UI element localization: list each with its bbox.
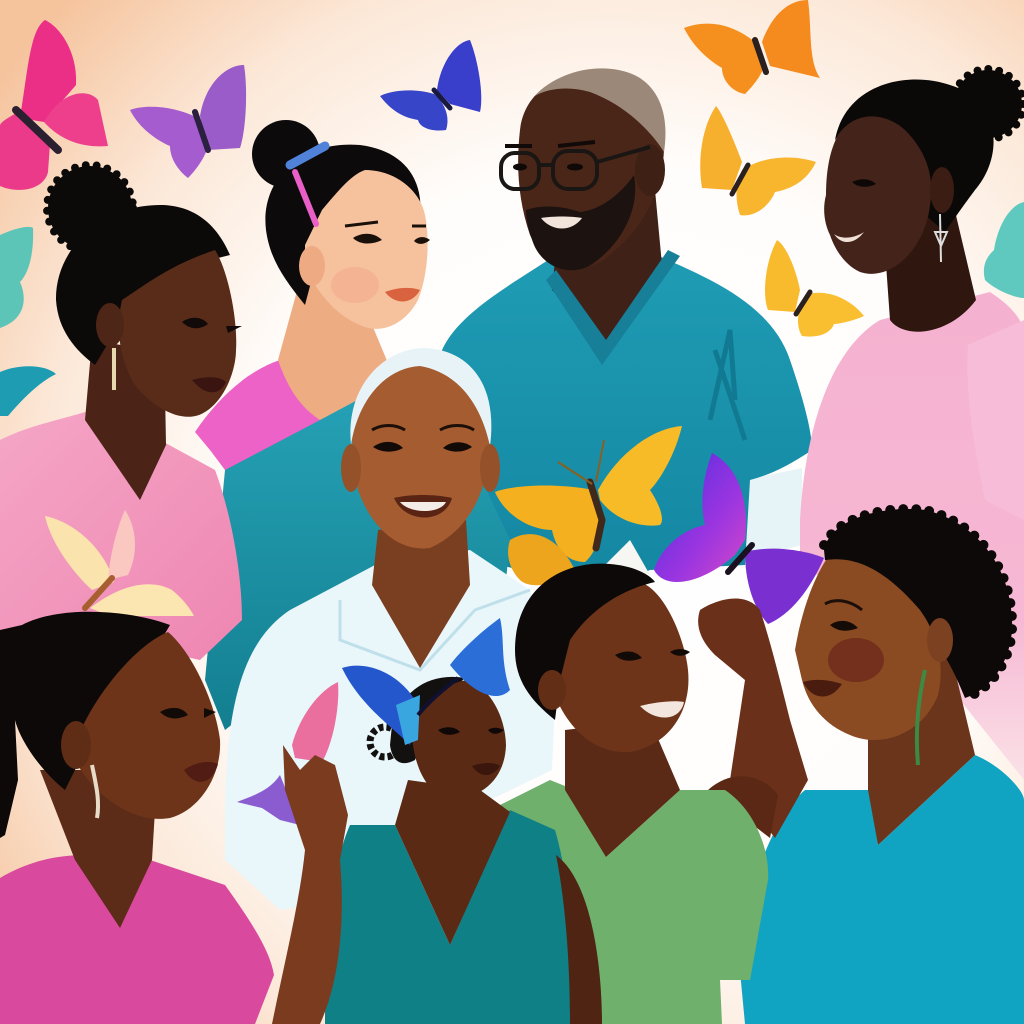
head xyxy=(352,360,490,548)
butterfly: purple small by hand xyxy=(237,775,300,825)
person: man in teal scrubs xyxy=(440,68,812,590)
butterfly: pink top left xyxy=(0,20,108,190)
shirt creases xyxy=(710,330,745,440)
person: woman bottom left in magenta xyxy=(0,612,348,1024)
hair xyxy=(390,677,465,763)
face xyxy=(119,250,236,417)
lips xyxy=(803,680,842,697)
hair xyxy=(835,80,994,232)
butterfly: yellow right upper xyxy=(700,106,816,215)
hair xyxy=(515,564,655,720)
person: small girl in teal xyxy=(325,677,602,1024)
neck xyxy=(40,770,155,928)
raised arm xyxy=(272,745,348,1024)
green shirt xyxy=(480,780,768,1024)
butterfly: blue top xyxy=(380,40,481,131)
mouth xyxy=(640,701,684,718)
ear xyxy=(96,303,124,347)
butterfly: orange top right xyxy=(684,0,820,94)
face xyxy=(75,632,220,819)
eyes xyxy=(353,234,430,244)
person: woman in teal sari xyxy=(195,120,510,730)
braided bun xyxy=(370,727,400,757)
face features xyxy=(852,179,876,187)
flower xyxy=(508,534,575,585)
butterfly: cream on pink shirt xyxy=(45,510,194,616)
ear xyxy=(538,670,566,710)
neck xyxy=(868,650,975,845)
eyes xyxy=(513,164,527,170)
magenta top xyxy=(195,360,320,470)
ear xyxy=(61,721,91,769)
eyes xyxy=(160,708,216,718)
shirt xyxy=(800,292,1024,780)
earring xyxy=(92,765,98,818)
neck xyxy=(372,520,470,668)
face xyxy=(795,559,941,740)
person: woman left in pink xyxy=(0,165,242,660)
lips xyxy=(192,377,226,392)
eyes xyxy=(615,649,690,661)
lips xyxy=(472,763,500,775)
person: woman top right in pink xyxy=(800,69,1024,780)
lips xyxy=(184,762,218,782)
head wrap xyxy=(350,348,491,446)
glasses xyxy=(501,147,650,189)
hair band xyxy=(290,146,325,165)
ear xyxy=(635,144,665,196)
beard xyxy=(526,175,635,270)
hair bun xyxy=(953,69,1023,139)
person: woman bottom right in teal xyxy=(738,509,1024,1024)
butterfly: teal right edge xyxy=(984,202,1024,298)
eyes xyxy=(830,621,858,631)
butterfly: purple top left xyxy=(130,65,246,178)
grey hair xyxy=(535,68,665,152)
shirt xyxy=(738,755,1024,1024)
eyes xyxy=(438,727,504,735)
earring xyxy=(917,670,925,765)
butterfly: blue on girl's head xyxy=(342,618,510,745)
eyes xyxy=(182,318,242,333)
neck xyxy=(552,190,662,345)
neck xyxy=(885,190,976,332)
face xyxy=(305,170,428,329)
butterfly: teal left edge xyxy=(0,227,33,328)
butterfly: blue left edge xyxy=(0,366,56,416)
neck and chest xyxy=(278,280,395,420)
shirt xyxy=(0,412,242,660)
earring xyxy=(112,348,116,390)
ears xyxy=(341,444,361,492)
butterfly: yellow right lower xyxy=(765,240,864,337)
ear xyxy=(927,618,953,662)
ear xyxy=(299,246,325,286)
ear xyxy=(930,167,954,213)
top xyxy=(325,810,573,1024)
face xyxy=(412,680,506,798)
earring xyxy=(935,214,947,262)
coat shadow folds xyxy=(340,590,530,670)
person: bald woman in white coat xyxy=(225,348,555,910)
sari body xyxy=(205,370,510,730)
neck xyxy=(565,720,680,857)
blush xyxy=(828,638,884,682)
hair xyxy=(265,145,421,305)
cuff xyxy=(745,468,802,560)
hair xyxy=(824,509,1012,698)
hair xyxy=(56,205,230,365)
hair xyxy=(0,612,170,838)
coat xyxy=(225,550,555,910)
neck xyxy=(85,340,166,500)
neck xyxy=(395,780,510,945)
butterfly: large yellow center xyxy=(495,426,682,585)
face xyxy=(824,116,931,274)
mouth xyxy=(541,216,582,228)
shirt xyxy=(0,855,274,1024)
eyes xyxy=(373,442,472,452)
smile xyxy=(394,495,452,518)
head xyxy=(545,582,688,752)
right arm xyxy=(556,855,602,1024)
hair bun xyxy=(252,120,320,188)
head xyxy=(518,70,665,268)
butterfly: large purple xyxy=(654,453,824,624)
person: boy in green xyxy=(480,564,808,1024)
raised arm xyxy=(698,598,808,838)
shirt xyxy=(440,252,812,590)
butterfly: pink small by hand xyxy=(292,682,338,762)
lips xyxy=(385,288,420,302)
hair bun xyxy=(47,165,133,251)
